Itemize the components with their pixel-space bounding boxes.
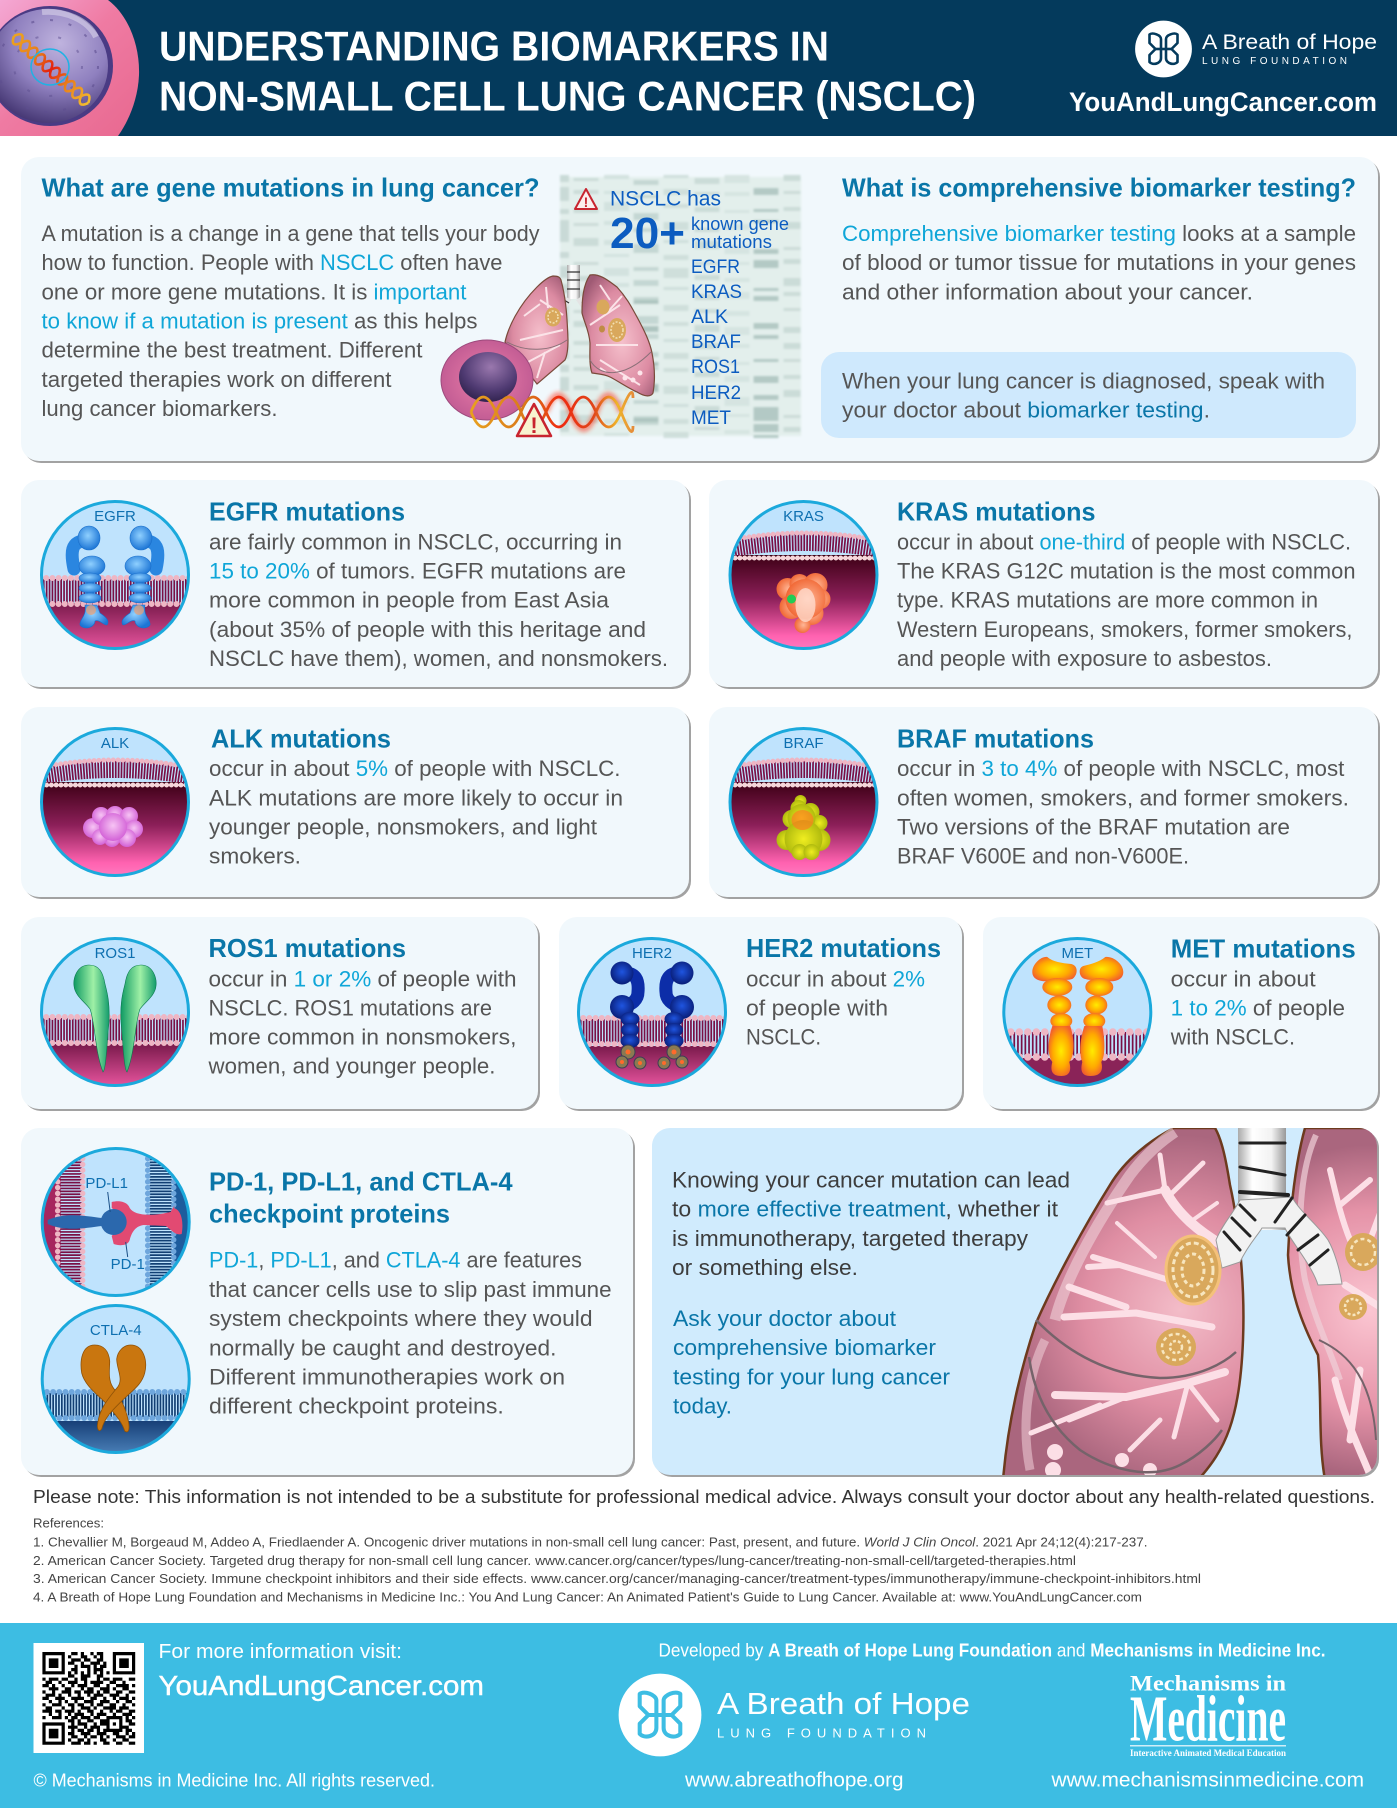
logo: A Breath of Hope footer: A Breath of Hope — [717, 1686, 970, 1721]
panel: EGFR — [21, 480, 691, 689]
trachea and bronchi — [1216, 1124, 1342, 1285]
text: mutation definition: how to function. People with NSCLC often have — [42, 250, 502, 275]
gene mutation list — [610, 188, 789, 429]
text: of people with — [746, 995, 888, 1020]
logo: A Breath of Hope — [1135, 21, 1377, 77]
text: BRAF V600E and non-V600E. — [897, 844, 1189, 869]
text: Different immunotherapies work on — [209, 1364, 565, 1389]
text: Two versions of the BRAF mutation are — [897, 814, 1290, 839]
text: with NSCLC. — [1170, 1024, 1295, 1049]
text: knowing your mutation: to more effective treatment , whether it — [672, 1196, 1058, 1221]
gene mutation list: EGFR — [691, 256, 740, 278]
logo: A Breath of Hope: A Breath of Hope — [1202, 30, 1377, 54]
callout: speak with your doctor: your doctor about biomarker testing . — [842, 397, 1210, 422]
heading: PD-1, PD-L1, and CTLA-4 — [209, 1167, 513, 1197]
text: different checkpoint proteins. — [209, 1393, 504, 1418]
text: mutation definition: A mutation is a change in a gene that tells your body — [42, 221, 540, 246]
text: knowing your mutation — [672, 1167, 1070, 1280]
references: 4. A Breath of Hope Lung Foundation and Mechanisms in Medicine Inc.: You And Lung Cancer: An Animated Patient's Guide to Lung Cancer. Available at: www.YouAndLungCancer.com — [33, 1591, 1142, 1605]
gene mutation list: KRAS — [691, 281, 742, 303]
medical disclaimer: Please note: This information is not intended to be a substitute for professional medical advice. Always consult your doctor about any health-related questions. — [33, 1486, 1375, 1507]
text — [1170, 966, 1345, 1049]
text: occur in about one-third of people with NSCLC. — [897, 529, 1351, 554]
icon: CTLA-4: CTLA-4 — [90, 1322, 142, 1339]
icon: PD-1 and PD-L1 — [41, 1147, 194, 1297]
panel: ALK — [21, 707, 691, 899]
text: mutation definition: one or more gene mutations. It is important — [42, 279, 466, 304]
references: 3. American Cancer Society. Immune checkpoint inhibitors and their side effects. www.cancer.org/cancer/managing-cancer/treatment-types/immunotherapy/immune-checkpoint-inhibitors.html — [33, 1572, 1201, 1586]
text — [209, 529, 668, 671]
text: ask your doctor — [673, 1306, 950, 1418]
text — [209, 1248, 612, 1418]
text: ask your doctor: comprehensive biomarker — [673, 1335, 936, 1360]
icon: EGFR receptor: EGFR — [94, 508, 136, 525]
icon: MET receptor: MET — [1061, 945, 1093, 962]
text: women, and younger people. — [207, 1053, 496, 1078]
text: ALK mutations are more likely to occur in — [209, 785, 623, 810]
text — [207, 966, 517, 1078]
icon: HER2 receptor — [577, 937, 727, 1087]
panel: ROS1 — [21, 917, 540, 1111]
footer: more information — [158, 1641, 484, 1701]
text: mutation definition: determine the best treatment. Different — [42, 338, 422, 363]
footer: more information: For more information visit: — [158, 1641, 402, 1663]
title: NON-SMALL CELL LUNG CANCER (NSCLC) — [159, 72, 976, 120]
icon: EGFR receptor — [40, 500, 190, 650]
logo: A Breath of Hope: LUNG FOUNDATION — [1202, 56, 1347, 67]
QR code — [34, 1643, 144, 1753]
text: occur in 1 or 2% of people with — [208, 966, 516, 991]
panel: HER2 — [559, 917, 964, 1111]
text: PD-1, PD-L1, and CTLA-4 are features — [209, 1248, 582, 1273]
footer: more information: YouAndLungCancer.com — [158, 1670, 484, 1701]
heading — [209, 1167, 513, 1229]
website: YouAndLungCancer.com — [1069, 87, 1377, 117]
illustration: DNA helix — [471, 392, 633, 432]
logo: A Breath of Hope footer: LUNG FOUNDATION — [717, 1726, 926, 1741]
panel: KRAS — [709, 480, 1380, 689]
developed by: Developed by A Breath of Hope Lung Foundation and Mechanisms in Medicine Inc. — [658, 1641, 1326, 1661]
callout: speak with your doctor: When your lung cancer is diagnosed, speak with — [842, 368, 1325, 393]
left lung — [1003, 1128, 1243, 1480]
heading: ROS1 mutations — [208, 933, 406, 963]
heading: HER2 mutations — [746, 933, 941, 963]
text: NSCLC have them), women, and nonsmokers. — [209, 646, 668, 671]
icon: PD-1 and PD-L1: PD-L1 — [85, 1175, 128, 1192]
text: NSCLC. ROS1 mutations are — [208, 995, 492, 1020]
icon: KRAS protein — [726, 500, 882, 650]
text: occur in about — [1171, 966, 1316, 991]
heading: MET mutations — [1171, 934, 1356, 964]
icon: cancer cell with DNA — [0, 0, 139, 136]
icon: ROS1 receptor — [40, 937, 190, 1087]
gene mutation list: 20+ — [610, 209, 685, 258]
references: 2. American Cancer Society. Targeted drug therapy for non-small cell lung cancer. www.cancer.org/cancer/types/lung-cancer/treating-non-small-cell/targeted-therapies.html — [33, 1554, 1076, 1568]
text: NSCLC. — [746, 1024, 821, 1049]
text: type. KRAS mutations are more common in — [897, 588, 1318, 613]
icon: warning triangle small: ! — [584, 194, 588, 210]
text: testing definition: of blood or tumor tissue for mutations in your genes — [842, 250, 1356, 275]
text: mutation definition: targeted therapies work on different — [42, 367, 392, 392]
text: The KRAS G12C mutation is the most common — [897, 559, 1356, 584]
heading: KRAS mutations — [897, 497, 1096, 527]
text: mutation definition: lung cancer biomarkers. — [42, 396, 278, 421]
illustration: cancer cell — [441, 340, 533, 420]
text: occur in about 5% of people with NSCLC. — [209, 756, 620, 781]
text: mutation definition — [42, 221, 540, 421]
text: knowing your mutation: is immunotherapy, targeted therapy — [672, 1226, 1028, 1251]
illustration: lungs with tumors — [505, 265, 654, 396]
references: 1. Chevallier M, Borgeaud M, Addeo A, Friedlaender A. Oncogenic driver mutations in non-small cell lung cancer: Past, present, and future. World J Clin Oncol . 2021 Apr 24;12(4):217-237. — [33, 1536, 1148, 1550]
text: mutation definition: to know if a mutation is present as this helps — [42, 309, 478, 334]
text — [897, 756, 1349, 869]
right lung — [1288, 1128, 1385, 1480]
text: 15 to 20% of tumors. EGFR mutations are — [209, 559, 626, 584]
text: younger people, nonsmokers, and light — [209, 814, 597, 839]
copyright: © Mechanisms in Medicine Inc. All rights reserved. — [34, 1770, 435, 1791]
text: often women, smokers, and former smokers. — [897, 785, 1349, 810]
panel: mutations and testing intro — [21, 157, 1380, 463]
text: testing definition: Comprehensive biomarker testing looks at a sample — [842, 221, 1356, 246]
website: abreathofhope: www.abreathofhope.org — [684, 1770, 904, 1792]
footer — [0, 1623, 1397, 1808]
text: ask your doctor: testing for your lung cancer — [673, 1364, 950, 1389]
heading: what are gene mutations: What are gene mutations in lung cancer? — [42, 172, 540, 202]
text: occur in about 2% — [746, 966, 925, 991]
gene mutation list: HER2 — [691, 382, 741, 404]
references — [33, 1517, 1201, 1605]
icon: CTLA-4 — [41, 1304, 191, 1454]
callout: speak with your doctor — [821, 352, 1356, 438]
logo: Mechanisms in Medicine: Mechanisms in — [1130, 1671, 1286, 1696]
text — [746, 966, 925, 1049]
text — [209, 756, 623, 869]
panel: MET — [983, 917, 1380, 1111]
illustration: large lungs with tumors — [1003, 1124, 1385, 1480]
icon: warning triangle large — [517, 404, 551, 438]
text: testing definition — [842, 221, 1356, 304]
icon: warning triangle small — [575, 189, 597, 210]
gene mutation list: NSCLC has — [610, 188, 721, 211]
logo: Mechanisms in Medicine — [1130, 1671, 1287, 1759]
text: smokers. — [209, 844, 301, 869]
icon: ROS1 receptor: ROS1 — [95, 945, 135, 962]
title — [159, 22, 976, 120]
tumors — [1156, 1233, 1381, 1366]
text: that cancer cells use to slip past immune — [209, 1277, 612, 1302]
icon: ALK protein — [37, 727, 193, 877]
panel: BRAF — [709, 707, 1380, 899]
header banner — [0, 0, 1397, 136]
text — [897, 529, 1356, 671]
text: normally be caught and destroyed. — [209, 1335, 556, 1360]
text: knowing your mutation: Knowing your cancer mutation can lead — [672, 1167, 1070, 1192]
gene mutation list: BRAF — [691, 331, 741, 353]
icon: HER2 receptor: HER2 — [632, 945, 672, 962]
icon: PD-1 and PD-L1: PD-1 — [111, 1256, 145, 1273]
logo: A Breath of Hope footer — [619, 1674, 970, 1756]
heading: checkpoint proteins — [209, 1199, 450, 1229]
logo: Mechanisms in Medicine: Interactive Animated Medical Education — [1130, 1749, 1287, 1759]
references: References: — [33, 1517, 104, 1531]
gel electrophoresis background — [560, 175, 801, 438]
panel: ask your doctor with lungs — [652, 1124, 1385, 1480]
icon: ALK protein: ALK — [101, 735, 129, 752]
panel: checkpoint proteins — [21, 1128, 635, 1477]
gene mutation list: ROS1 — [691, 356, 740, 378]
text: testing definition: and other information about your cancer. — [842, 279, 1253, 304]
title: UNDERSTANDING BIOMARKERS IN — [159, 22, 829, 70]
text: ask your doctor: today. — [673, 1393, 732, 1418]
text: (about 35% of people with this heritage and — [209, 617, 646, 642]
icon: BRAF protein — [726, 727, 882, 877]
text: are fairly common in NSCLC, occurring in — [209, 529, 622, 554]
gene mutation list: mutations — [691, 232, 772, 252]
text: more common in nonsmokers, — [208, 1024, 516, 1049]
text: more common in people from East Asia — [209, 588, 610, 613]
heading: EGFR mutations — [209, 497, 405, 527]
text: knowing your mutation: or something else. — [672, 1255, 858, 1280]
text: system checkpoints where they would — [209, 1306, 593, 1331]
icon: KRAS protein: KRAS — [783, 508, 824, 525]
logo: Mechanisms in Medicine: Medicine — [1130, 1683, 1286, 1756]
icon: BRAF protein: BRAF — [783, 735, 824, 752]
text: ask your doctor: Ask your doctor about — [673, 1306, 896, 1331]
gene mutation list: ALK — [691, 306, 728, 328]
text: and people with exposure to asbestos. — [897, 646, 1272, 671]
heading: comprehensive biomarker testing: What is comprehensive biomarker testing? — [842, 172, 1356, 202]
icon: warning triangle large: ! — [530, 413, 538, 438]
icon: MET receptor — [1002, 937, 1152, 1087]
text: Western Europeans, smokers, former smokers, — [897, 617, 1352, 642]
text: 1 to 2% of people — [1171, 995, 1345, 1020]
text: occur in 3 to 4% of people with NSCLC, most — [897, 756, 1344, 781]
website: mechanismsinmedicine: www.mechanismsinmedicine.com — [1050, 1770, 1364, 1792]
gene mutation list: MET — [691, 407, 731, 429]
gene mutation list: known gene — [691, 214, 789, 234]
heading: BRAF mutations — [897, 723, 1094, 753]
heading: ALK mutations — [211, 723, 391, 753]
